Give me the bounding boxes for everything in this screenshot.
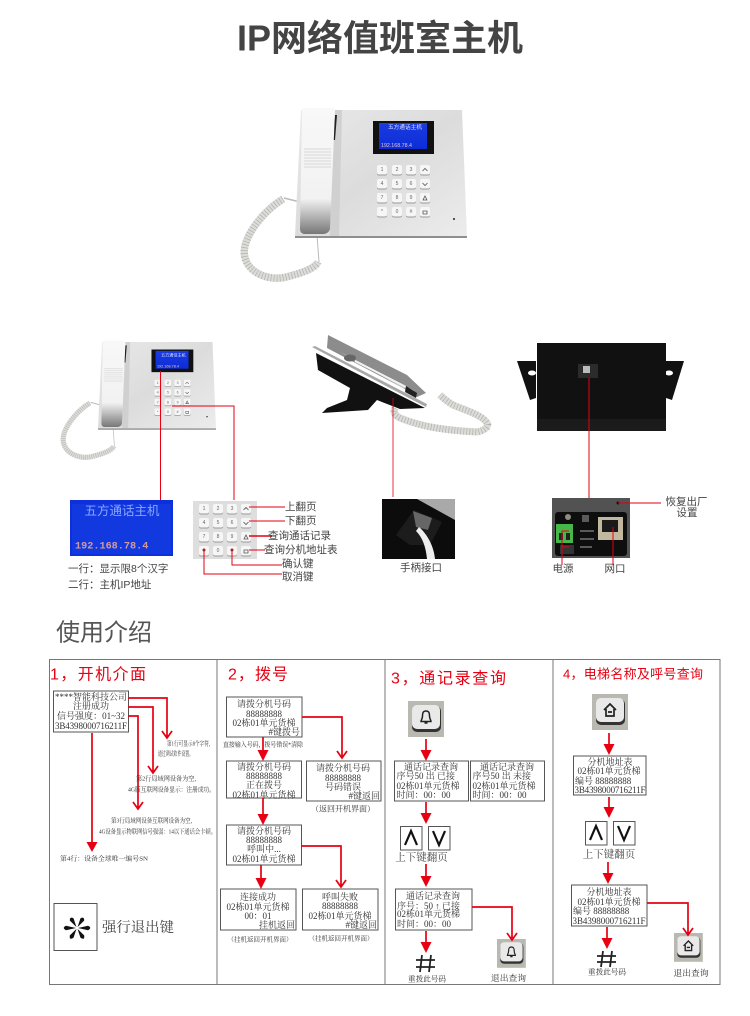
record LCD: missed: 02栋01单元货梯 bbox=[472, 780, 536, 791]
record LCD: answered: 02栋01单元货梯 bbox=[396, 780, 460, 791]
main phone photo: 2 bbox=[396, 167, 399, 173]
dialing LCD: input: 88888888 bbox=[246, 709, 282, 719]
small phone front view: 3 bbox=[177, 381, 179, 385]
main phone photo: 3 bbox=[410, 167, 413, 173]
LCD close-up: 192.168.78.4 bbox=[75, 542, 148, 552]
record arrows bbox=[420, 739, 517, 953]
boot notes: 4G设备显示物联网信号强弱：14以下通话会卡顿。 bbox=[99, 826, 216, 836]
boot LCD: 3B4398000716211F bbox=[55, 721, 127, 731]
boot notes bbox=[60, 738, 216, 862]
dialing LCD: input: 请拨分机号码 bbox=[237, 698, 291, 709]
dialing LCD: failed bbox=[302, 889, 378, 930]
phone side view with stand bbox=[312, 335, 488, 432]
small phone front view bbox=[63, 341, 216, 457]
dialing LCD: connected: 挂机返回 bbox=[259, 919, 295, 930]
keypad close-up bbox=[193, 501, 257, 559]
dialing LCD: dialing in progress: 请拨分机号码 bbox=[237, 761, 291, 772]
icon: exit home key bbox=[674, 933, 703, 962]
panel 2 heading: 2，拨号 bbox=[228, 666, 288, 684]
LCD caption bbox=[68, 562, 168, 591]
small phone front view: 0 bbox=[167, 410, 169, 414]
circuit board photo: 网口 bbox=[604, 563, 626, 575]
record LCD: missed: 时间：00：00 bbox=[472, 789, 527, 800]
main phone photo: 192.168.78.4 bbox=[381, 143, 412, 149]
dialing LCD: dialing in progress bbox=[226, 761, 302, 800]
small phone front view: 9 bbox=[177, 400, 179, 404]
record LCD: answered: 通话记录查询 bbox=[404, 761, 458, 772]
small phone front view: * bbox=[157, 410, 159, 414]
main phone photo: 8 bbox=[396, 195, 399, 201]
main phone photo: # bbox=[410, 209, 413, 215]
dialing LCD: calling: 02栋01单元货梯 bbox=[232, 853, 296, 864]
icon: force exit key bbox=[54, 904, 97, 950]
address LCD detail: 3B4398000716211F bbox=[572, 916, 646, 926]
icon: exit bell key bbox=[497, 939, 526, 968]
up and down keys: 上下键翻页 bbox=[395, 850, 448, 864]
record LCD: answered: 序号50 出 已接 bbox=[396, 770, 455, 781]
circuit board photo bbox=[552, 495, 708, 575]
main phone photo: 6 bbox=[410, 181, 413, 187]
keypad close-up: 1 bbox=[203, 506, 206, 512]
small phone front view: # bbox=[177, 410, 179, 414]
keypad close-up: 7 bbox=[203, 534, 206, 540]
dialing LCD: failed: 88888888 bbox=[322, 901, 358, 911]
dialing LCD: wrong number: #键返回 bbox=[348, 790, 380, 801]
keypad close-up: 8 bbox=[217, 534, 220, 540]
lookup arrows bbox=[602, 733, 693, 949]
dialing LCD: wrong number: 88888888 bbox=[325, 773, 362, 783]
up and down keys: 上下键翻页 bbox=[583, 848, 636, 860]
dialing LCD: calling: 88888888 bbox=[246, 835, 282, 845]
up and down keys bbox=[395, 826, 450, 864]
address LCD: 分机地址表 bbox=[587, 756, 633, 767]
LCD caption: 二行：主机IP地址 bbox=[68, 578, 152, 591]
dialing LCD: wrong number: 请拨分机号码 bbox=[316, 762, 370, 773]
small phone front view: 4 bbox=[157, 391, 159, 395]
hang-up notes bbox=[228, 934, 374, 944]
boot LCD: 注册成功 bbox=[73, 700, 109, 711]
dialing LCD: failed: #键返回 bbox=[345, 919, 377, 930]
icon: hash key bbox=[588, 951, 626, 976]
boot LCD: 信号强度：01~32 bbox=[57, 710, 125, 721]
dialing LCD: failed: 02栋01单元货梯 bbox=[308, 910, 372, 921]
address LCD detail: 分机地址表 bbox=[586, 886, 632, 897]
panel 4: elevator name and number lookup bbox=[553, 660, 720, 984]
boot notes: 第4行：设备全球唯一编号SN bbox=[60, 854, 148, 862]
address LCD detail: 02栋01单元货梯 bbox=[577, 896, 641, 907]
address LCD: 编号 88888888 bbox=[575, 775, 632, 786]
dialing LCD: connected: 00：01 bbox=[244, 911, 272, 921]
keypad callouts bbox=[202, 500, 338, 583]
back panel view bbox=[517, 343, 684, 431]
dialing LCD: connected: 02栋01单元货梯 bbox=[226, 901, 290, 912]
small phone front view: 五方通话主机 bbox=[161, 351, 187, 357]
circuit board photo: 设置 bbox=[676, 507, 698, 519]
record LCD: answered: 时间：00：00 bbox=[396, 789, 451, 800]
red callout leader lines bbox=[160, 371, 589, 500]
main phone photo: 4 bbox=[381, 181, 384, 187]
dialing LCD: dialing in progress: 88888888 bbox=[246, 771, 282, 781]
boot LCD bbox=[54, 691, 128, 732]
small phone front view: 8 bbox=[167, 400, 169, 404]
small phone front view: 2 bbox=[167, 381, 169, 385]
keypad close-up: 6 bbox=[231, 520, 234, 526]
panel 2: dialing bbox=[217, 660, 385, 984]
keypad close-up: 3 bbox=[231, 506, 234, 512]
keypad close-up: 9 bbox=[231, 534, 234, 540]
record LCD: detail: 通话记录查询 bbox=[406, 890, 460, 901]
main phone photo: 0 bbox=[396, 209, 399, 215]
small phone front view: 1 bbox=[157, 381, 159, 385]
LCD caption: 一行：显示限8个汉字 bbox=[68, 562, 168, 575]
icon: bell key bbox=[408, 701, 444, 737]
icon: home key bbox=[592, 694, 628, 730]
panel 1: boot screen bbox=[50, 660, 217, 984]
boot notes: 通过调试软件设置。 bbox=[158, 748, 193, 758]
dialing LCD: dialing in progress: 正在拨号 bbox=[246, 779, 282, 790]
panel 1 heading: 1，开机介面 bbox=[50, 666, 146, 684]
dialing LCD: dialing in progress: 02栋01单元货梯 bbox=[232, 789, 296, 800]
main phone photo: 9 bbox=[410, 195, 413, 201]
dialing LCD: connected: 连接成功 bbox=[240, 891, 276, 902]
dialing LCD: wrong number bbox=[306, 761, 381, 801]
title: IP网络值班室主机 bbox=[237, 18, 523, 58]
keypad close-up: 0 bbox=[217, 548, 220, 554]
main phone photo: 5 bbox=[396, 181, 399, 187]
hang-up notes: （挂机返回开机界面） bbox=[228, 934, 292, 944]
panel 3: call records bbox=[385, 660, 553, 984]
address LCD: 3B4398000716211F bbox=[574, 785, 646, 795]
main phone photo: 1 bbox=[381, 167, 384, 173]
address LCD: 02栋01单元货梯 bbox=[577, 765, 641, 776]
dialing LCD: calling: 呼叫中... bbox=[247, 843, 281, 854]
main phone photo: 7 bbox=[381, 195, 384, 201]
record LCD: missed: 序号50 出 未接 bbox=[472, 770, 531, 781]
boot notes: 第2行局域网设备为空, bbox=[136, 774, 196, 782]
panel 4 heading: 4，电梯名称及呼号查询 bbox=[563, 666, 703, 682]
section heading: usage: 使用介绍 bbox=[56, 620, 152, 646]
handset port photo bbox=[382, 499, 455, 574]
main phone photo bbox=[244, 108, 467, 278]
wrong number note: （返回开机界面） bbox=[311, 804, 375, 814]
keypad callouts: 取消键 bbox=[282, 570, 314, 583]
LCD close-up: 五方通话主机 bbox=[84, 503, 160, 518]
boot arrows bbox=[86, 698, 172, 852]
icon: hash key: 重拨此号码 bbox=[588, 966, 626, 976]
address LCD detail: 编号 88888888 bbox=[573, 905, 630, 916]
keypad callouts: 上翻页 bbox=[285, 500, 316, 513]
keypad callouts: 查询通话记录 bbox=[268, 529, 331, 542]
record LCD: answered bbox=[394, 761, 468, 801]
address LCD detail bbox=[572, 885, 647, 926]
dialing LCD: calling bbox=[226, 825, 302, 865]
record LCD: missed: 通话记录查询 bbox=[480, 761, 534, 772]
keypad callouts: 查询分机地址表 bbox=[264, 543, 338, 556]
boot notes: 第1行可显示8个字符, bbox=[167, 738, 210, 748]
small phone front view: 5 bbox=[167, 391, 169, 395]
keypad callouts: 下翻页 bbox=[285, 514, 316, 527]
LCD close-up bbox=[70, 500, 173, 556]
dialing LCD: input bbox=[226, 697, 302, 737]
dialing LCD: failed: 呼叫失败 bbox=[322, 891, 358, 902]
record LCD: detail: 02栋01单元货梯 bbox=[397, 908, 460, 919]
boot notes: 4G版互联网设备显示：注册成功。 bbox=[128, 784, 215, 794]
boot LCD: ****智能科技公司 bbox=[55, 691, 127, 702]
address LCD bbox=[574, 756, 646, 795]
circuit board photo: 恢复出厂 bbox=[666, 495, 708, 508]
keypad callouts: 确认键 bbox=[282, 557, 314, 570]
dialing arrows bbox=[256, 717, 347, 889]
small phone front view: 192.168.78.4 bbox=[157, 365, 179, 369]
main phone photo: * bbox=[381, 209, 383, 215]
dialing LCD: input: #键拨号 bbox=[268, 726, 300, 737]
record LCD: detail: 时间：00：00 bbox=[397, 918, 452, 929]
circuit board photo: 电源 bbox=[552, 562, 574, 575]
hang-up notes: （挂机返回开机界面） bbox=[308, 934, 374, 942]
icon: hash key bbox=[408, 955, 446, 984]
record LCD: missed bbox=[470, 761, 544, 801]
keypad close-up: 4 bbox=[203, 520, 206, 526]
main phone photo: 五方通话主机 bbox=[388, 123, 422, 131]
icon: hash key: 重拨此号码 bbox=[408, 974, 446, 984]
small phone front view: 7 bbox=[157, 400, 159, 404]
dialing LCD: wrong number: 号码错误 bbox=[325, 781, 361, 792]
panel 3 heading: 3，通记录查询 bbox=[391, 670, 506, 688]
boot notes: 第3行局域网设备互联网设备为空, bbox=[111, 816, 192, 824]
record LCD: detail: 序号：50 ↑ 已接 bbox=[397, 900, 460, 911]
force exit label: 强行退出键 bbox=[102, 919, 174, 936]
dialing LCD: calling: 请拨分机号码 bbox=[237, 825, 291, 836]
handset port photo: 手柄接口 bbox=[400, 561, 442, 574]
dialing LCD: connected bbox=[220, 889, 296, 930]
record LCD: detail bbox=[396, 889, 472, 930]
keypad close-up: 5 bbox=[217, 520, 220, 526]
dialing hint: 直接输入号码，拨号错误*清除 bbox=[223, 740, 303, 748]
keypad close-up: 2 bbox=[217, 506, 220, 512]
small phone front view: 6 bbox=[177, 391, 179, 395]
dialing LCD: input: 02栋01单元货梯 bbox=[232, 717, 296, 728]
exit query label: 退出查询 bbox=[673, 967, 709, 978]
exit query label: 退出查询 bbox=[491, 972, 526, 983]
up and down keys bbox=[583, 822, 636, 860]
